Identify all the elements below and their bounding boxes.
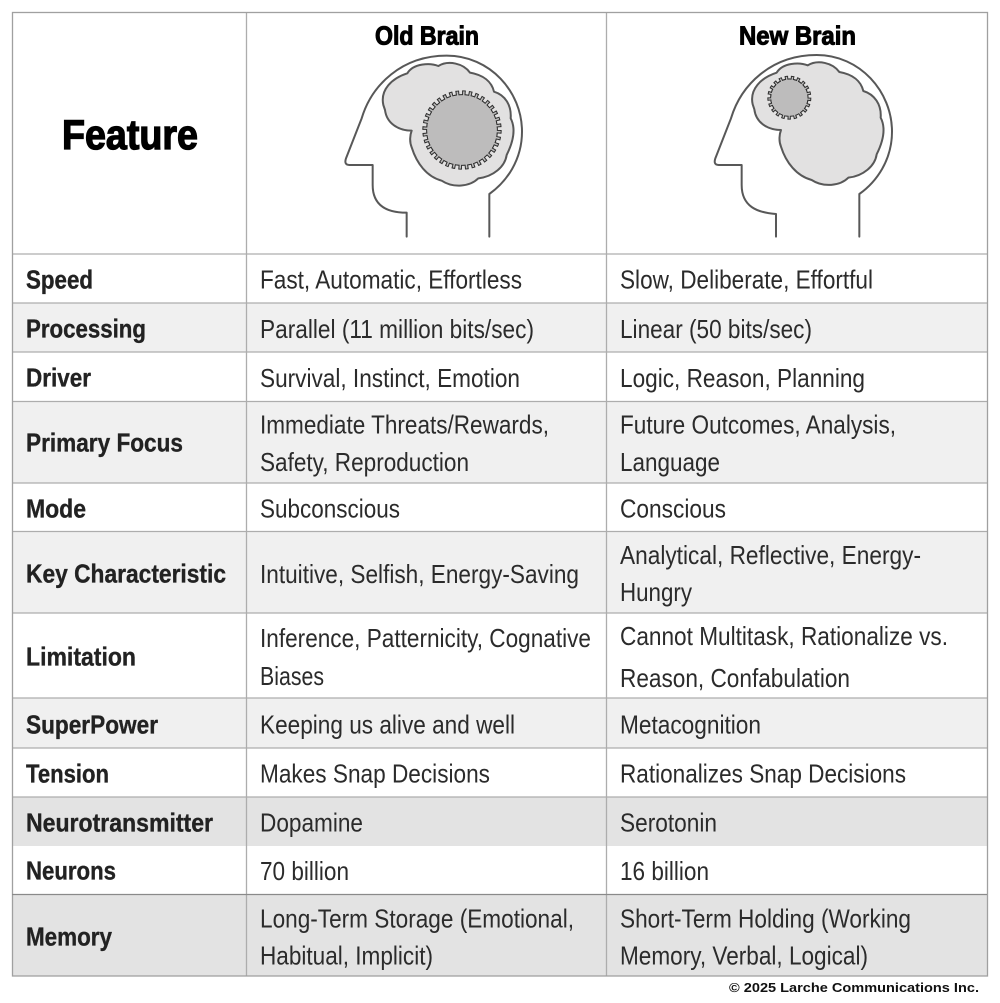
row: Driver <box>26 362 865 393</box>
row: Primary Focus: Immediate Threats/Rewards, <box>260 410 549 440</box>
row: Speed: Fast, Automatic, Effortless <box>260 264 522 294</box>
row: SuperPower <box>26 709 761 740</box>
row: Speed <box>26 264 873 294</box>
row: Neurons: Neurons <box>26 855 116 885</box>
row: Driver: Driver <box>26 362 91 392</box>
row: Processing: Processing <box>26 313 146 343</box>
row: Memory: Habitual, Implicit) <box>260 940 433 970</box>
row: Neurotransmitter: Neurotransmitter <box>26 807 213 837</box>
row: Speed: Slow, Deliberate, Effortful <box>620 264 873 294</box>
row: Memory: Short-Term Holding (Working <box>620 904 911 934</box>
row: Memory: Long-Term Storage (Emotional, <box>260 904 574 934</box>
row: Tension <box>26 758 906 788</box>
row: SuperPower: Metacognition <box>620 710 761 740</box>
row: Mode: Subconscious <box>260 494 400 524</box>
row shading bands <box>12 303 987 976</box>
row: Mode <box>26 493 726 524</box>
heading: Old Brain: Old Brain <box>375 20 479 50</box>
row: Key Characteristic: Hungry <box>620 577 692 607</box>
row: Primary Focus <box>26 410 896 477</box>
row: Driver: Survival, Instinct, Emotion <box>260 363 520 393</box>
row: Limitation: Reason, Confabulation <box>620 663 850 693</box>
row: Primary Focus: Safety, Reproduction <box>260 447 469 477</box>
row: Neurons <box>26 855 709 886</box>
row: Neurotransmitter: Serotonin <box>620 808 717 838</box>
row: Neurons: 16 billion <box>620 856 709 886</box>
row: Key Characteristic: Analytical, Reflective, Energy- <box>620 540 921 570</box>
icon: new brain head with small gear <box>715 55 892 237</box>
row: Primary Focus: Primary Focus <box>26 427 183 457</box>
row: Neurons: 70 billion <box>260 856 349 886</box>
row: Memory <box>26 904 911 970</box>
row: Key Characteristic <box>26 540 921 607</box>
row: Primary Focus: Future Outcomes, Analysis, <box>620 410 896 440</box>
row: Mode: Conscious <box>620 494 726 524</box>
row: Neurotransmitter <box>26 807 717 838</box>
row: Limitation: Biases <box>260 661 324 691</box>
row: Processing <box>26 313 812 344</box>
row: Tension: Rationalizes Snap Decisions <box>620 758 906 788</box>
heading: New Brain: New Brain <box>739 20 856 50</box>
row: Limitation: Limitation <box>26 641 136 671</box>
row: Tension: Makes Snap Decisions <box>260 758 490 788</box>
row: SuperPower: Keeping us alive and well <box>260 710 515 740</box>
row: SuperPower: SuperPower <box>26 709 158 739</box>
row: Primary Focus: Language <box>620 447 720 477</box>
icon: old brain head with large gear <box>345 56 522 237</box>
row: Memory: Memory, Verbal, Logical) <box>620 940 868 970</box>
heading: Feature: Feature <box>62 111 198 158</box>
row: Processing: Linear (50 bits/sec) <box>620 314 812 344</box>
row: Processing: Parallel (11 million bits/sec) <box>260 314 534 344</box>
row: Limitation <box>26 621 948 693</box>
row: Speed: Speed <box>26 264 93 294</box>
row: Mode: Mode <box>26 493 86 523</box>
copyright footer: © 2025 Larche Communications Inc. <box>729 980 979 995</box>
row: Key Characteristic: Key Characteristic <box>26 558 226 588</box>
row: Limitation: Cannot Multitask, Rationalize vs. <box>620 621 948 651</box>
row: Limitation: Inference, Patternicity, Cognative <box>260 623 591 653</box>
row: Driver: Logic, Reason, Planning <box>620 363 865 393</box>
row: Tension: Tension <box>26 758 109 788</box>
row: Memory: Memory <box>26 921 112 951</box>
row: Key Characteristic: Intuitive, Selfish, Energy-Saving <box>260 559 579 589</box>
row: Neurotransmitter: Dopamine <box>260 808 363 838</box>
